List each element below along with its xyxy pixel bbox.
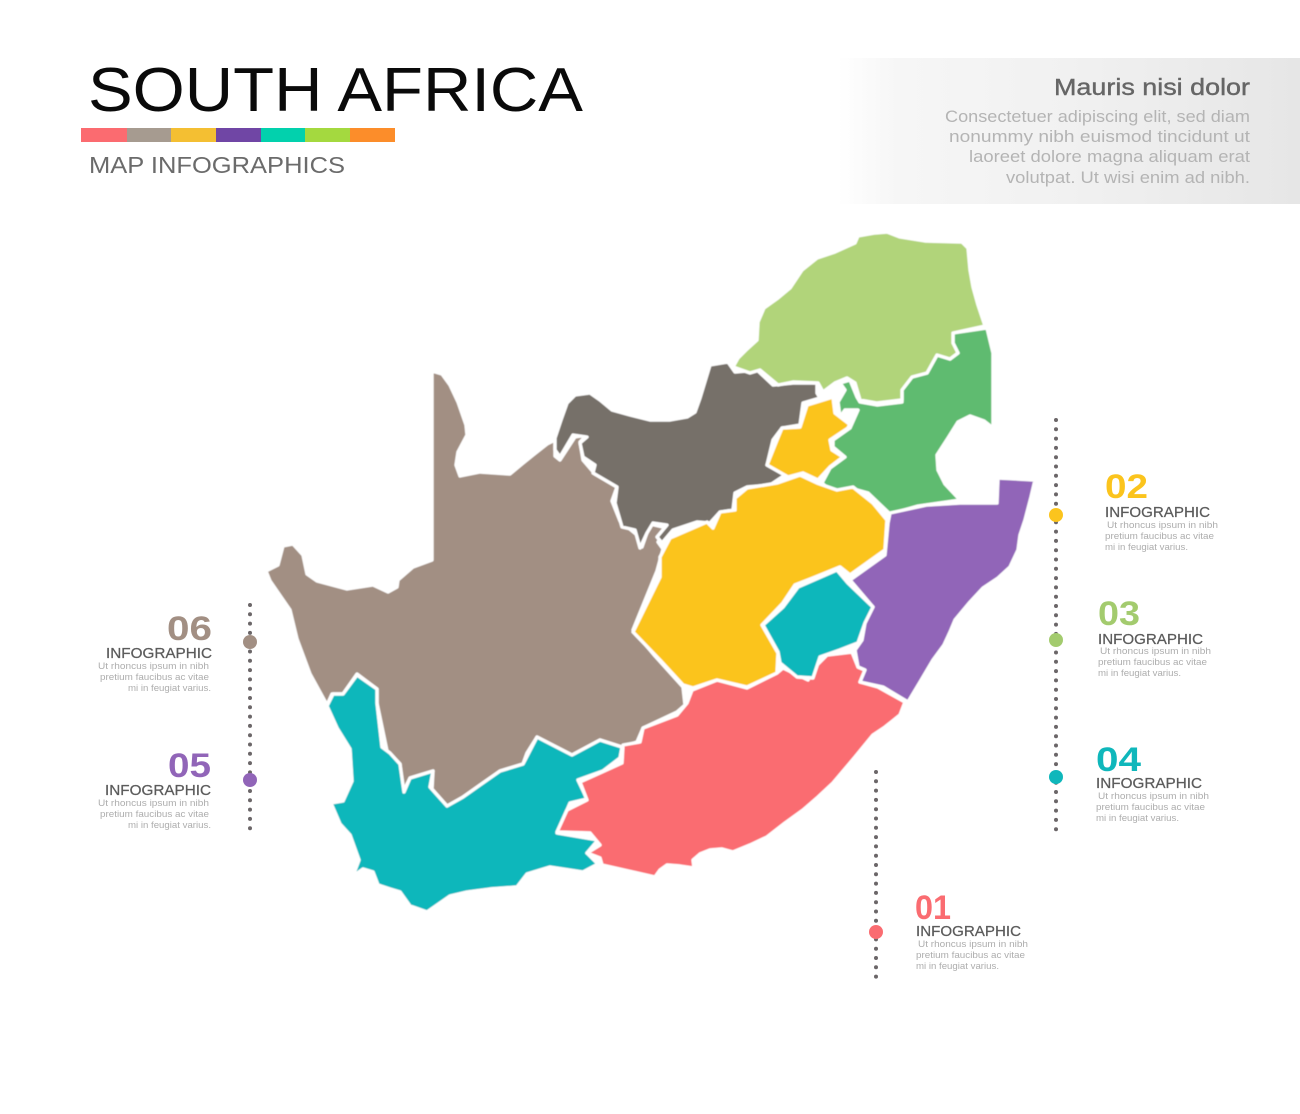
region: Limpopo [733,232,985,403]
region: Free State [633,475,887,688]
region: Mpumalanga [822,328,993,514]
callout 05: 05 [168,747,211,785]
callout 06: 06 [167,610,212,648]
callout 03 [1049,595,1211,679]
callout 04: mi in feugiat varius. [1096,813,1179,824]
panel text block: Consectetuer adipiscing elit, sed diam [945,107,1250,126]
panel text block: laoreet dolore magna aliquam erat [969,147,1250,166]
callout 02 [1049,468,1218,553]
callout 03: 03 [1098,595,1140,633]
panel: intro text [838,58,1300,204]
map of South Africa [266,232,1035,912]
callout 03: INFOGRAPHIC [1098,631,1203,648]
subtitle: MAP INFOGRAPHICS [89,152,345,178]
callout 03: pretium faucibus ac vitae [1098,657,1207,668]
callout 05: Ut rhoncus ipsum in nibh [98,798,209,809]
region: KwaZulu-Natal [850,478,1035,702]
right dotted connector [1054,420,1058,836]
callout 05: mi in feugiat varius. [128,820,211,831]
callout 05 [98,747,257,831]
callout 02: INFOGRAPHIC [1105,504,1210,521]
panel text block: volutpat. Ut wisi enim ad nibh. [1006,168,1250,187]
region: Western Cape [327,675,622,912]
callout 02: pretium faucibus ac vitae [1105,531,1214,542]
callout 05: pretium faucibus ac vitae [100,809,209,820]
callout 01 [869,772,1028,982]
callout 05: INFOGRAPHIC [105,782,211,799]
callout 06 [98,610,257,694]
region: Eastern Cape [557,652,905,877]
panel text block [945,107,1250,187]
panel text block: nonummy nibh euismod tincidunt ut [949,127,1250,146]
region: Northern Cape [266,371,685,806]
callout 04: 04 [1096,741,1141,779]
callout 03: mi in feugiat varius. [1098,668,1181,679]
region: Lesotho [763,570,873,678]
callout 01: mi in feugiat varius. [916,961,999,972]
callout 02: Ut rhoncus ipsum in nibh [1107,520,1218,531]
panel heading: Mauris nisi dolor [1054,74,1250,100]
callout 06: pretium faucibus ac vitae [100,672,209,683]
callout 01: pretium faucibus ac vitae [916,950,1025,961]
region: North West [555,362,820,548]
callout 04: INFOGRAPHIC [1096,775,1202,792]
callout 06: mi in feugiat varius. [128,683,211,694]
callout 03: Ut rhoncus ipsum in nibh [1100,646,1211,657]
callout 04: Ut rhoncus ipsum in nibh [1098,791,1209,802]
colour bar [81,128,395,142]
callout 04 [1049,741,1209,824]
callout 06: INFOGRAPHIC [106,645,212,662]
callout 01: 01 [915,889,951,927]
callout 01: Ut rhoncus ipsum in nibh [918,939,1028,950]
title: SOUTH AFRICA [88,56,584,125]
callout 06: Ut rhoncus ipsum in nibh [98,661,209,672]
callout 02: 02 [1105,468,1148,506]
callout 04: pretium faucibus ac vitae [1096,802,1205,813]
left dotted connector [248,605,252,836]
callout 02: mi in feugiat varius. [1105,542,1188,553]
region: Gauteng [767,397,855,480]
callout 01: INFOGRAPHIC [916,923,1021,940]
